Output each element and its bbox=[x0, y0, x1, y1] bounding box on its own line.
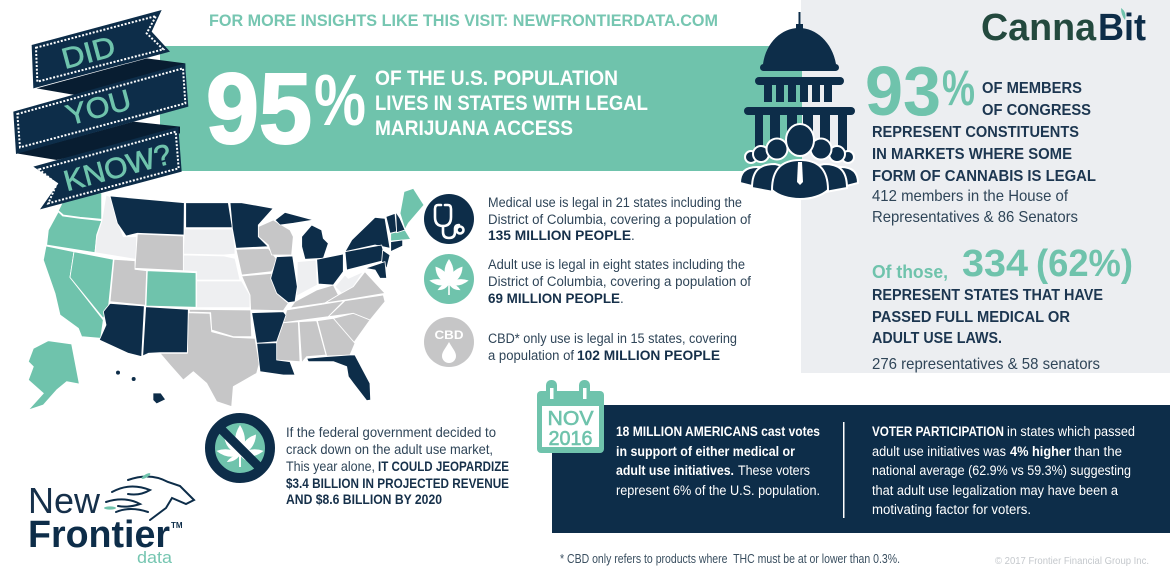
panel: navy voter box bbox=[552, 405, 1170, 533]
icon: calendar Nov 2016: NOV bbox=[548, 408, 594, 430]
text: congress statement: 412 members in the House of bbox=[872, 188, 1069, 205]
panel: mint headline banner bbox=[160, 46, 802, 171]
legend text: medical use: 135 MILLION PEOPLE bbox=[488, 228, 631, 243]
legend text: CBD only bbox=[488, 331, 737, 363]
text: 18 million Americans: represent 6% of the U.S. population. bbox=[616, 483, 820, 498]
text: full medical or adult use: REPRESENT STATES THAT HAVE bbox=[872, 287, 1103, 304]
statistic: 95 percent: 95 bbox=[206, 53, 312, 165]
statistic: 93 percent: % bbox=[942, 60, 975, 116]
headline text: MARIJUANA ACCESS bbox=[375, 116, 573, 140]
logo: New Frontier data bbox=[28, 472, 194, 567]
text: 18 million Americans: adult use initiatives. bbox=[616, 463, 734, 478]
legend text: medical use: . bbox=[631, 228, 635, 243]
legend text: CBD only: a population of bbox=[488, 348, 574, 363]
text: voter participation bbox=[872, 424, 1135, 517]
legend text: medical use: Medical use is legal in 21 states including the bbox=[488, 195, 742, 210]
legend text: adult use: . bbox=[620, 291, 624, 306]
legend text: adult use: Adult use is legal in eight states including the bbox=[488, 257, 745, 272]
logo: New Frontier data: Frontier bbox=[28, 514, 170, 556]
text: federal crackdown: This year alone, bbox=[286, 458, 375, 474]
text: congress statement: Representatives & 86 Senators bbox=[872, 209, 1078, 226]
text: voter participation: VOTER PARTICIPATION bbox=[872, 424, 1004, 439]
text: voter participation: 4% higher bbox=[1010, 444, 1072, 459]
text: 18 million Americans: These voters bbox=[738, 463, 810, 478]
footnote: * CBD only refers to products where THC must be at or lower than 0.3%. bbox=[560, 552, 900, 566]
logo: New Frontier data: New bbox=[28, 480, 101, 521]
text: congress statement bbox=[872, 80, 1096, 226]
icon: calendar Nov 2016 bbox=[537, 380, 604, 453]
ribbon: did you know: YOU bbox=[63, 84, 135, 132]
text: congress statement: OF CONGRESS bbox=[982, 102, 1091, 119]
text: federal crackdown: crack down on the adult use market, bbox=[286, 441, 493, 457]
statistic: 93 percent: 93 bbox=[865, 52, 941, 130]
text: full medical or adult use: ADULT USE LAWS. bbox=[872, 330, 1002, 347]
text: 18 million Americans: in support of either medical or bbox=[616, 444, 796, 459]
copyright: © 2017 Frontier Financial Group Inc. bbox=[995, 556, 1149, 567]
text: congress statement: IN MARKETS WHERE SOME bbox=[872, 146, 1072, 163]
icon: banned cannabis leaf bbox=[210, 418, 270, 478]
text: voter participation: motivating factor for voters. bbox=[872, 502, 1031, 517]
ribbon: did you know bbox=[13, 10, 188, 209]
text: voter participation: in states which passed bbox=[1007, 424, 1135, 439]
statistic: 95 percent: % bbox=[314, 61, 366, 141]
text: federal crackdown bbox=[286, 424, 509, 507]
statistic: 334 of those bbox=[872, 243, 1133, 285]
legend text: adult use: 69 MILLION PEOPLE bbox=[488, 291, 620, 306]
map of US states bbox=[28, 188, 424, 410]
text: voter participation: that adult use legalization may have been a bbox=[872, 483, 1118, 498]
headline text: OF THE U.S. POPULATION bbox=[375, 66, 618, 90]
icon: cannabis leaf bbox=[424, 254, 474, 304]
text: congress statement: FORM OF CANNABIS IS LEGAL bbox=[872, 168, 1096, 185]
logo: CannaBit: Canna bbox=[981, 7, 1097, 49]
statistic: 334 of those: (62%) bbox=[1036, 243, 1133, 285]
statistic: 334 of those: Of those, bbox=[872, 262, 948, 282]
legend text: medical use bbox=[488, 195, 751, 243]
logo: CannaBit: Bit bbox=[1098, 7, 1146, 49]
icon: CBD drop bbox=[424, 317, 474, 367]
text: congress statement: OF MEMBERS bbox=[982, 80, 1082, 97]
link line: more insights: FOR MORE INSIGHTS LIKE THIS VISIT: NEWFRONTIERDATA.COM bbox=[209, 11, 718, 30]
statistic: 334 of those: 334 bbox=[962, 243, 1028, 285]
text: federal crackdown: AND $8.6 BILLION BY 2020 bbox=[286, 491, 442, 507]
text: federal crackdown: $3.4 BILLION IN PROJECTED REVENUE bbox=[286, 475, 509, 491]
icon: calendar Nov 2016: 2016 bbox=[548, 428, 592, 450]
legend text: CBD only: CBD* only use is legal in 15 states, covering bbox=[488, 331, 737, 346]
logo: New Frontier data: TM bbox=[171, 521, 183, 530]
logo: New Frontier data: data bbox=[137, 548, 173, 567]
statistic: 95 percent bbox=[206, 53, 366, 165]
text: congress statement: REPRESENT CONSTITUENTS bbox=[872, 124, 1079, 141]
icon: capitol building with people bbox=[740, 12, 858, 199]
icon: CBD drop: CBD bbox=[434, 328, 464, 342]
text: voter participation: adult use initiatives was bbox=[872, 444, 1006, 459]
text: full medical or adult use bbox=[872, 287, 1103, 373]
text: 18 million Americans bbox=[616, 424, 820, 498]
legend text: adult use: District of Columbia, covering a population of bbox=[488, 274, 751, 289]
ribbon: did you know: DID bbox=[58, 31, 119, 76]
headline text bbox=[375, 66, 648, 140]
text: federal crackdown: If the federal government decided to bbox=[286, 424, 496, 440]
text: full medical or adult use: 276 representatives & 58 senators bbox=[872, 356, 1100, 373]
text: voter participation: national average (62.9% vs 59.3%) suggesting bbox=[872, 463, 1131, 478]
ribbon: did you know: KNOW? bbox=[60, 139, 175, 198]
text: voter participation: than the bbox=[1074, 444, 1122, 459]
legend text: CBD only: 102 MILLION PEOPLE bbox=[577, 348, 720, 363]
headline text: LIVES IN STATES WITH LEGAL bbox=[375, 91, 648, 115]
text: 18 million Americans: 18 MILLION AMERICANS cast votes bbox=[616, 424, 820, 439]
legend text: medical use: District of Columbia, covering a population of bbox=[488, 212, 751, 227]
icon: stethoscope bbox=[424, 194, 474, 244]
panel: grey congress background bbox=[801, 0, 1170, 373]
legend text: adult use bbox=[488, 257, 751, 306]
text: federal crackdown: IT COULD JEOPARDIZE bbox=[378, 458, 509, 474]
text: full medical or adult use: PASSED FULL MEDICAL OR bbox=[872, 309, 1070, 326]
